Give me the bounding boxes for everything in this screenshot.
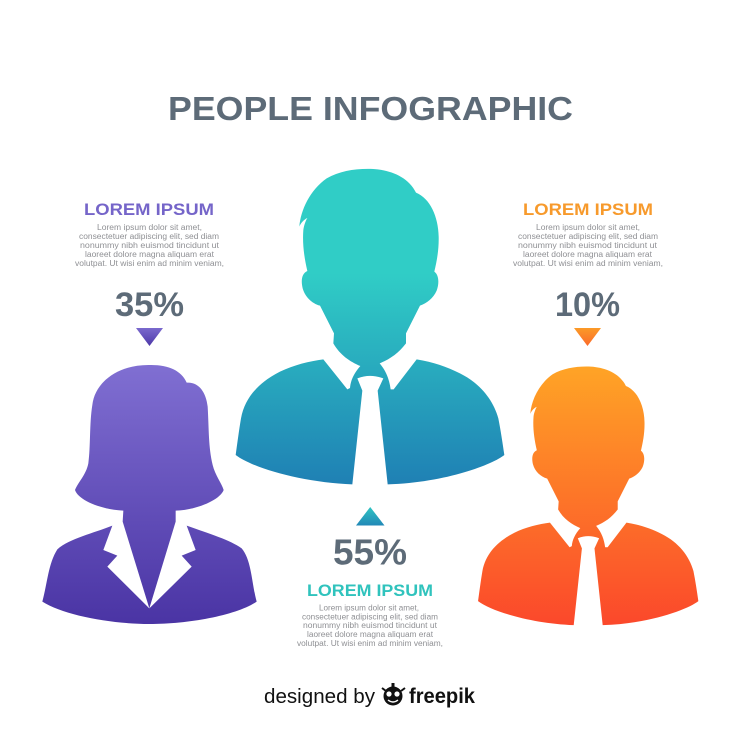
left body text: nonummy nibh euismod tincidunt ut <box>80 241 220 250</box>
center body text: nonummy nibh euismod tincidunt ut <box>303 621 438 630</box>
center body text: consectetuer adipiscing elit, sed diam <box>302 612 438 622</box>
person: man in teal (center) <box>236 169 504 484</box>
right body text: laoreet dolore magna aliquam erat <box>523 250 653 259</box>
right body text: volutpat. Ut wisi enim ad minim veniam, <box>513 259 663 268</box>
panel: right 10% <box>513 200 663 346</box>
center arrow <box>356 507 384 526</box>
center body text <box>297 604 443 648</box>
right body text <box>513 223 663 268</box>
person: woman in purple (left) <box>42 365 257 624</box>
left body text <box>75 223 224 268</box>
right body text: nonummy nibh euismod tincidunt ut <box>518 241 658 250</box>
left arrow <box>136 328 163 346</box>
center heading: LOREM IPSUM <box>307 581 433 600</box>
right body text: Lorem ipsum dolor sit amet, <box>536 223 640 232</box>
right arrow <box>574 328 601 346</box>
panel: center 55% <box>297 507 443 648</box>
footer credit <box>264 683 475 708</box>
left body text: Lorem ipsum dolor sit amet, <box>97 223 202 232</box>
right body text: consectetuer adipiscing elit, sed diam <box>518 232 658 241</box>
center body text: Lorem ipsum dolor sit amet, <box>319 604 419 612</box>
right heading: LOREM IPSUM <box>523 200 653 219</box>
person: man in orange (right) <box>478 366 698 625</box>
left body text: consectetuer adipiscing elit, sed diam <box>79 232 219 241</box>
right percentage: 10% <box>555 286 620 324</box>
left percentage: 35% <box>115 286 184 324</box>
center body text: laoreet dolore magna aliquam erat <box>307 630 434 639</box>
panel: left 35% <box>75 200 224 346</box>
left body text: laoreet dolore magna aliquam erat <box>85 250 215 259</box>
left body text: volutpat. Ut wisi enim ad minim veniam, <box>75 259 224 268</box>
left heading: LOREM IPSUM <box>84 200 214 219</box>
freepik wordmark: freepik <box>409 685 475 708</box>
center percentage: 55% <box>333 532 407 572</box>
center body text: volutpat. Ut wisi enim ad minim veniam, <box>297 639 443 648</box>
icon: freepik mascot <box>382 683 405 706</box>
title: PEOPLE INFOGRAPHIC <box>168 90 573 127</box>
designed by text: designed by <box>264 686 375 708</box>
